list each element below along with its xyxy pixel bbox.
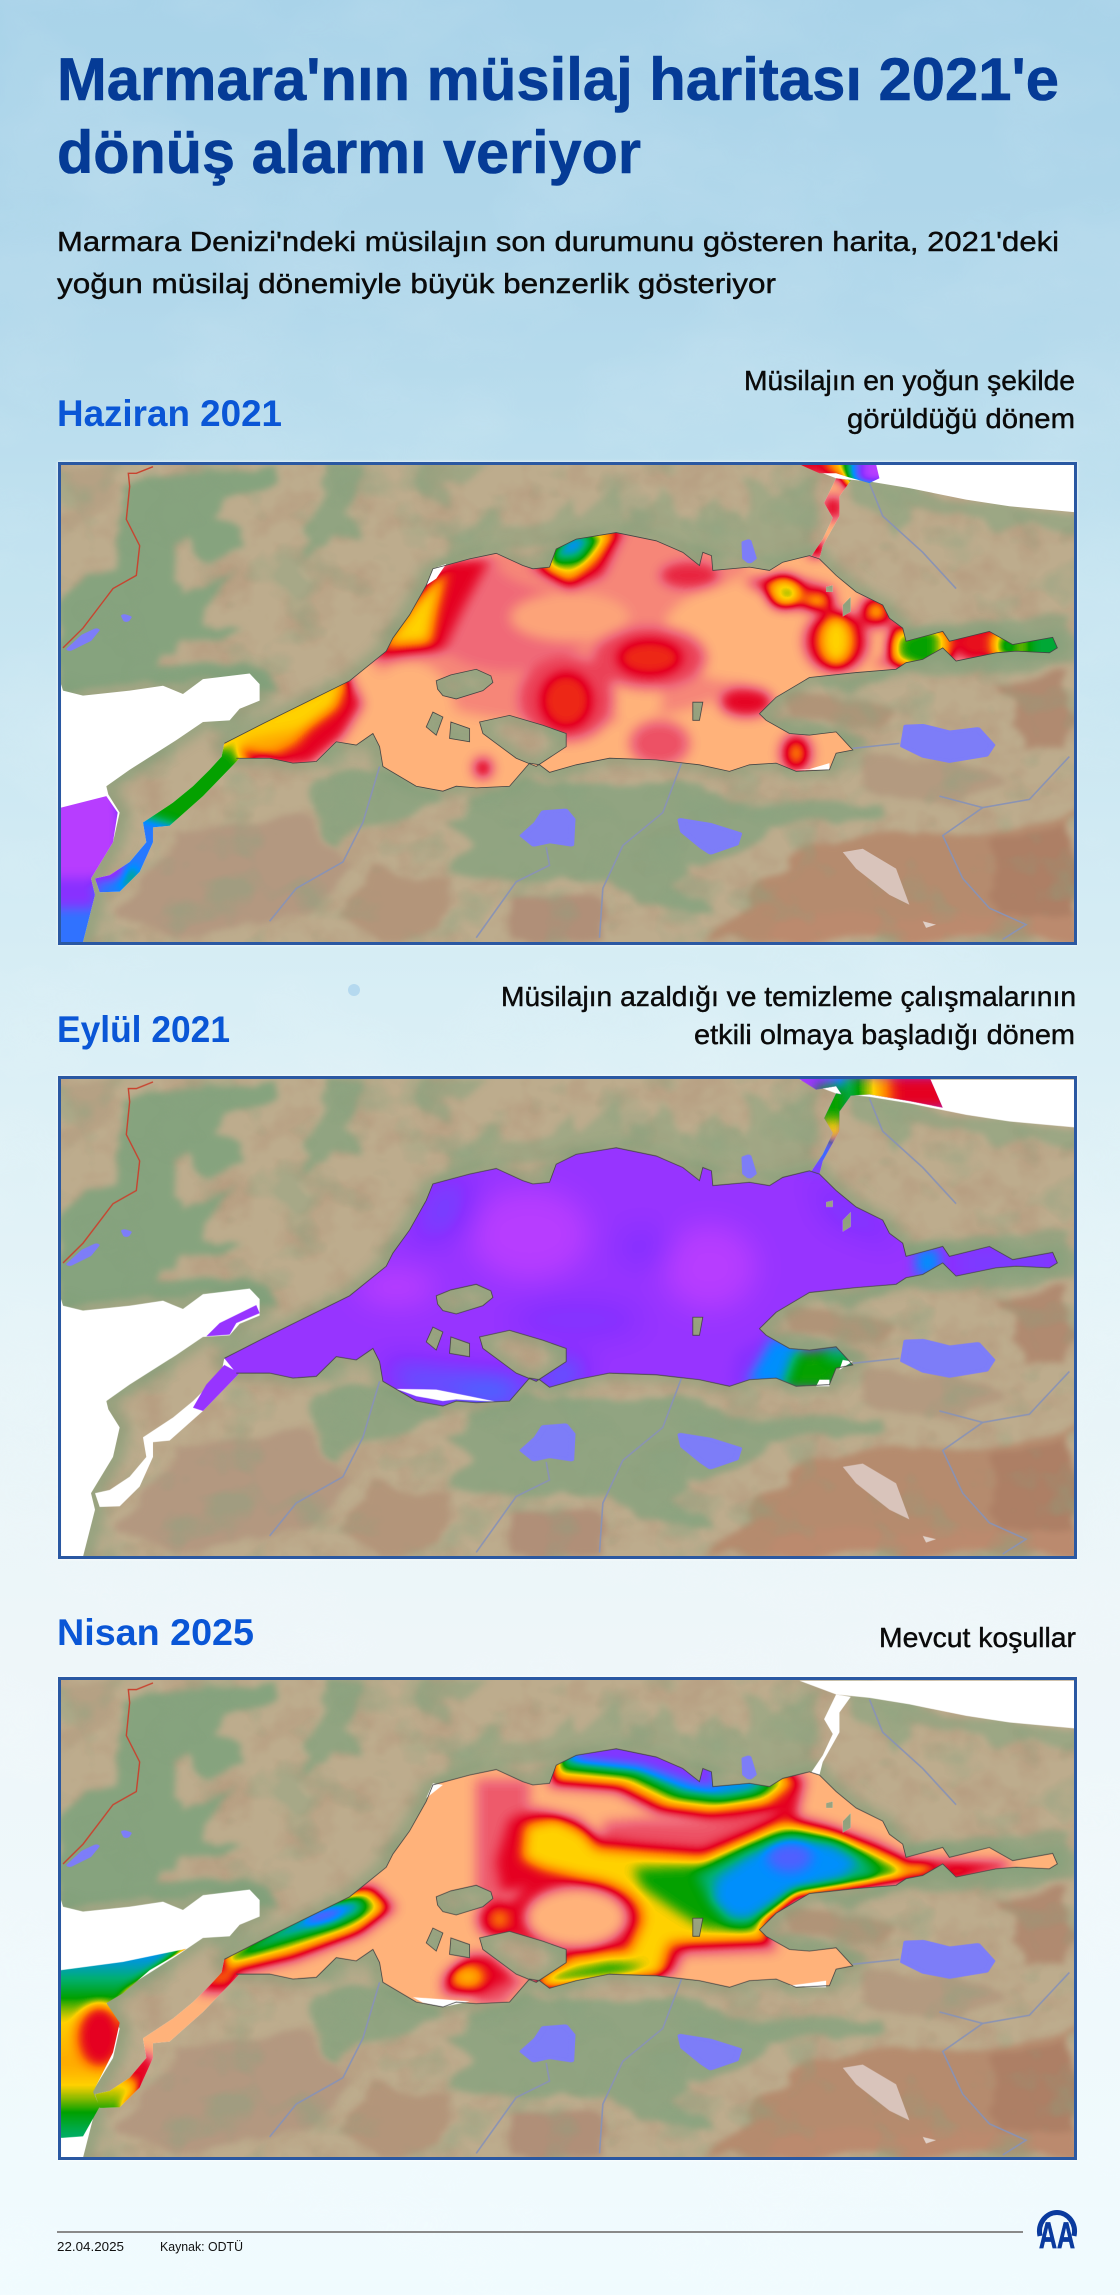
heading: Nisan 2025: Nisan 2025 [57, 1612, 254, 1653]
caption: Nisan 2025: Mevcut koşullar [879, 1622, 1076, 1653]
source: Kaynak: ODTÜ [160, 2239, 243, 2254]
subtitle [56, 226, 1059, 300]
western band [220, 1885, 396, 1977]
caption: Eylül 2021: etkili olmaya başladığı dönem [694, 1019, 1075, 1050]
caption: Haziran 2021: Müsilajın en yoğun şekilde [744, 365, 1075, 396]
subtitle: Marmara Denizi'ndeki müsilajın son durumunu gösteren harita, 2021'deki [57, 226, 1059, 257]
terrain base [56, 460, 1083, 948]
map: Nisan 2025 [58, 1677, 1077, 2160]
terrain base [56, 1075, 1083, 1562]
coastline [224, 1148, 1057, 1406]
no-data patches [426, 564, 829, 770]
coastline [224, 533, 1057, 791]
footer [57, 2210, 1078, 2256]
caption: Haziran 2021 [744, 365, 1075, 434]
terrain base [56, 1676, 1083, 2163]
title [57, 46, 1059, 186]
title: dönüş alarmı veriyor [57, 119, 641, 186]
icon: AA logo: AA [1039, 2215, 1075, 2256]
northern band [550, 1730, 806, 1819]
Aegean [61, 1948, 186, 2138]
icon: AA logo [1036, 2210, 1078, 2256]
footer rule [57, 2231, 1023, 2233]
heading: Eylül 2021: Eylül 2021 [57, 1009, 230, 1050]
no-data patches [413, 1783, 826, 2007]
date: 22.04.2025 [57, 2239, 124, 2254]
panel: Haziran 2021 [56, 365, 1078, 946]
heading: Haziran 2021: Haziran 2021 [57, 393, 282, 434]
mucilage heat field [193, 1079, 1057, 1411]
caption: Eylül 2021: Müsilajın azaldığı ve temizleme çalışmalarının [501, 981, 1076, 1012]
panel: Nisan 2025 [57, 1612, 1077, 2160]
no-data patches [396, 1360, 853, 1402]
mucilage heat field [61, 1749, 1057, 2138]
strait [100, 1970, 236, 2105]
coastline [224, 1749, 1057, 2007]
central bands [476, 1779, 1009, 1990]
map: Eylül 2021 [58, 1076, 1077, 1559]
caption: Eylül 2021 [501, 981, 1076, 1050]
title: Marmara'nın müsilaj haritası 2021'e [57, 46, 1059, 113]
subtitle: yoğun müsilaj dönemiyle büyük benzerlik gösteriyor [57, 268, 776, 299]
southern spots [443, 1899, 530, 2006]
mucilage heat field [61, 465, 1057, 942]
panel: Eylül 2021 [57, 981, 1078, 1560]
map: Haziran 2021 [58, 462, 1077, 945]
caption: Haziran 2021: görüldüğü dönem [847, 403, 1075, 434]
